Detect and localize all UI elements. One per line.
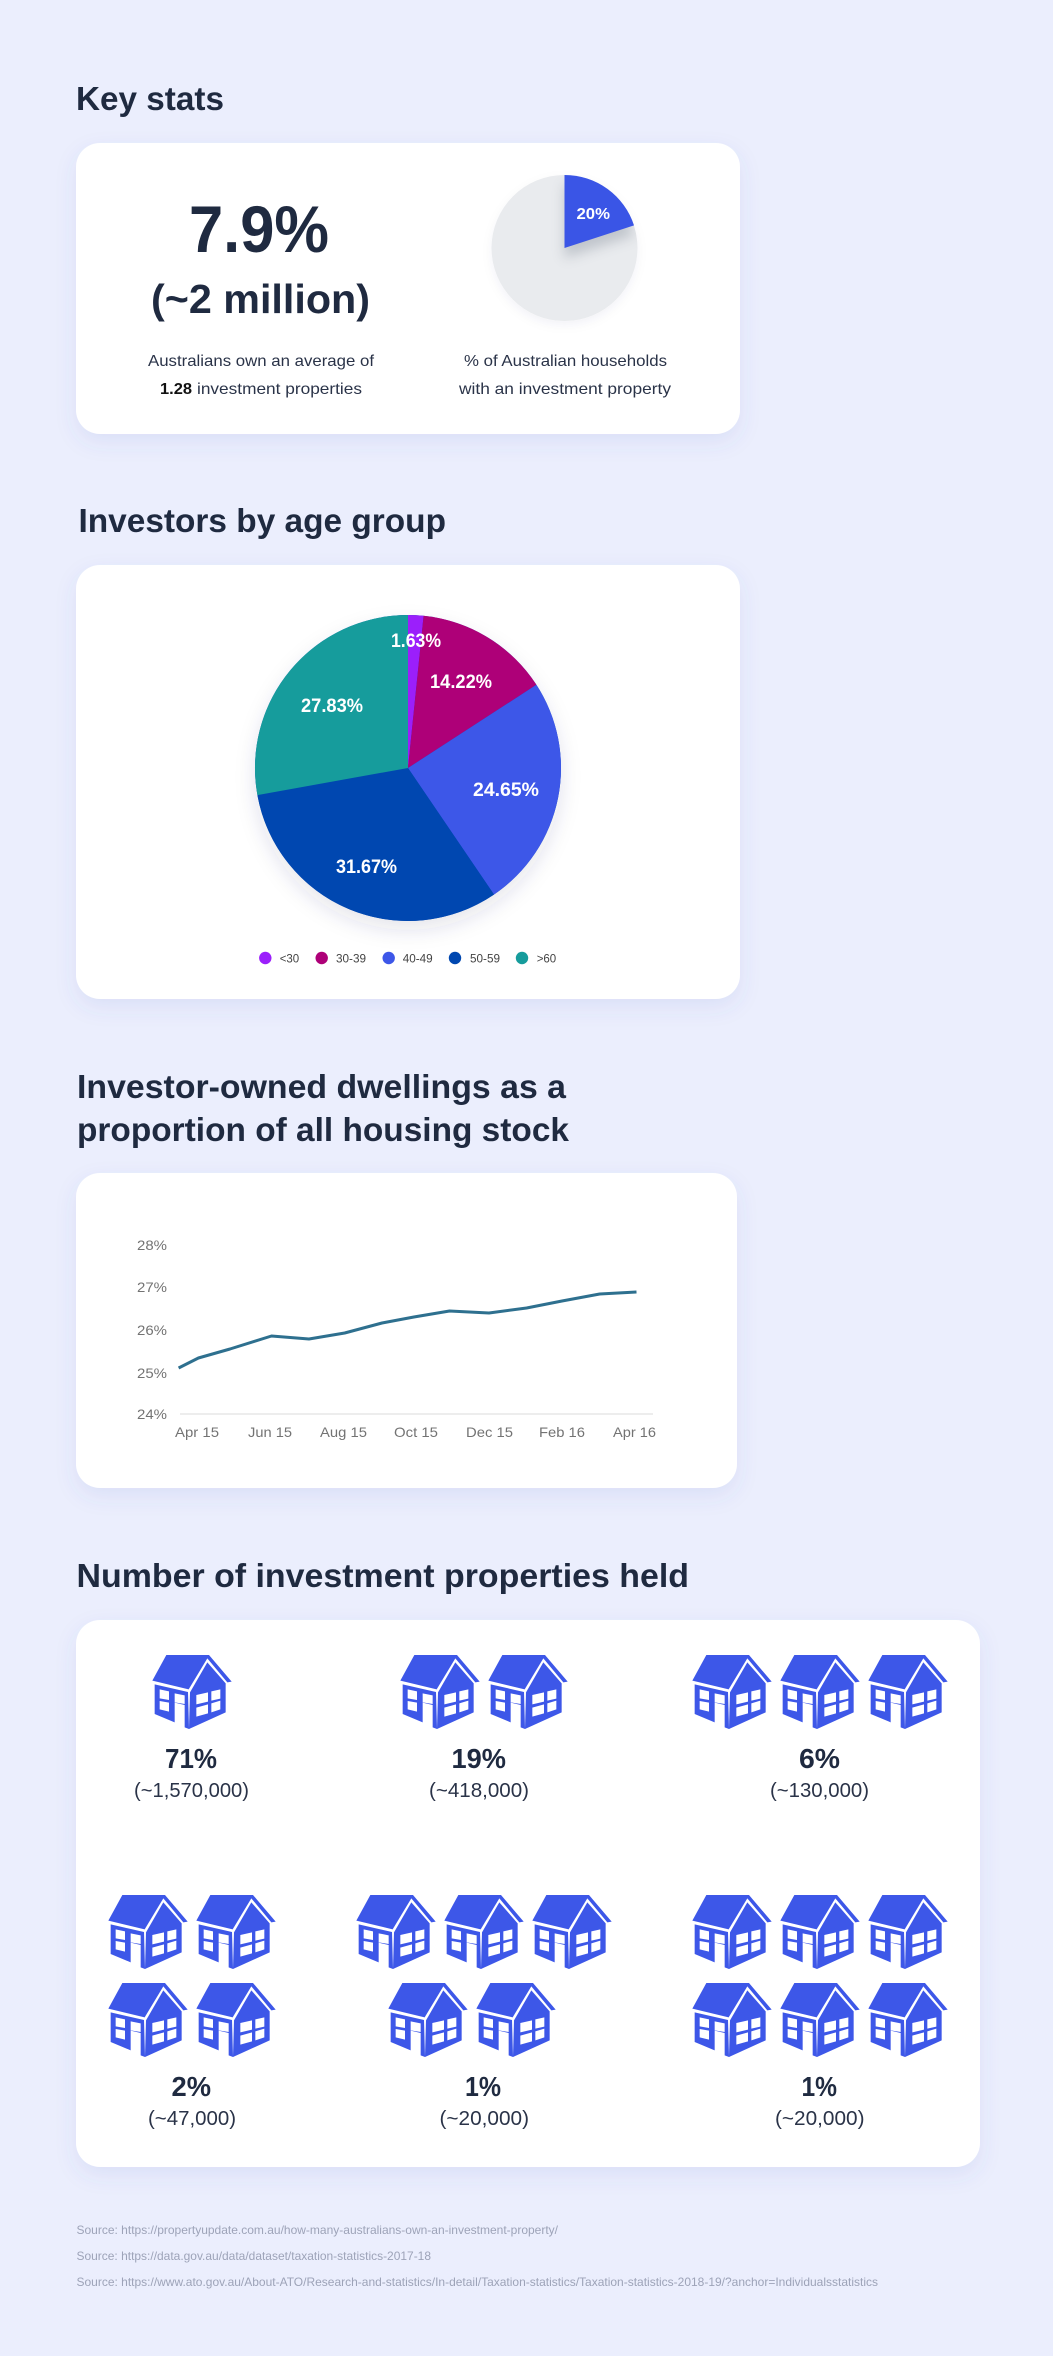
line chart: investor-owned share xyxy=(137,1237,656,1440)
pie chart: age groups xyxy=(255,615,561,921)
heading: Investor-owned dwellings xyxy=(77,1068,570,1148)
heading: Investor-owned dwellings: Investor-owned dwellings as a xyxy=(77,1068,567,1105)
legend: age groups: <30 xyxy=(280,952,300,966)
pie chart: age groups: 1.63% xyxy=(391,631,441,652)
pie chart: age groups: 24.65% xyxy=(473,780,539,801)
text: average properties: 1.28 xyxy=(160,381,192,398)
panel: key stats xyxy=(76,143,740,434)
group: six properties 1%: 1% xyxy=(802,2071,837,2102)
text: households caption: with an investment property xyxy=(458,381,671,398)
group: five properties 1%: 1% xyxy=(465,2071,501,2102)
line chart: investor-owned share: Oct 15 xyxy=(394,1424,438,1440)
pie chart: households 20% xyxy=(492,175,638,321)
group: one property 71%: 71% xyxy=(165,1743,217,1774)
panel: investors by age xyxy=(76,565,740,999)
pie chart: age groups: 27.83% xyxy=(301,696,363,717)
text: households caption: % of Australian households xyxy=(464,353,667,370)
group: five properties 1%: (~20,000) xyxy=(440,2108,529,2130)
line chart: investor-owned share: Apr 16 xyxy=(613,1424,656,1440)
text: average properties xyxy=(148,353,375,398)
pie chart: age groups: 31.67% xyxy=(336,857,397,878)
big stat: 7.9%: 7.9% xyxy=(189,192,329,266)
group: four properties 2% xyxy=(108,1895,276,2130)
line chart: investor-owned share: 27% xyxy=(137,1279,167,1295)
sources xyxy=(76,2223,878,2289)
text: households caption xyxy=(458,353,671,398)
line chart: investor-owned share: Apr 15 xyxy=(175,1424,219,1440)
stat: about 2 million: (~2 million) xyxy=(151,276,370,322)
group: two properties 19%: (~418,000) xyxy=(429,1780,529,1802)
group: four properties 2%: 2% xyxy=(172,2071,211,2102)
legend: age groups: 50-59 xyxy=(470,952,500,966)
legend: age groups xyxy=(259,952,557,966)
legend: age groups: 40-49 xyxy=(403,952,433,966)
heading: Investor-owned dwellings: proportion of all housing stock xyxy=(77,1111,570,1148)
sources: Source: https://data.gov.au/data/dataset/taxation-statistics-2017-18 xyxy=(76,2249,431,2263)
line chart: investor-owned share: Feb 16 xyxy=(539,1424,585,1440)
group: two properties 19% xyxy=(400,1655,568,1802)
line chart: investor-owned share: 24% xyxy=(137,1406,167,1422)
line chart: investor-owned share: Dec 15 xyxy=(466,1424,513,1440)
heading: Key stats: Key stats xyxy=(76,80,224,117)
heading: Number of investment properties held: Number of investment properties held xyxy=(76,1557,689,1594)
group: three properties 6%: 6% xyxy=(799,1743,840,1774)
heading: Investors by age group: Investors by age group xyxy=(78,502,446,539)
group: three properties 6%: (~130,000) xyxy=(770,1780,869,1802)
line chart: investor-owned share: 26% xyxy=(137,1322,167,1338)
group: six properties 1%: (~20,000) xyxy=(775,2108,864,2130)
group: one property 71% xyxy=(134,1655,249,1802)
sources: Source: https://www.ato.gov.au/About-ATO/Research-and-statistics/In-detail/Taxation-statistics/Taxation-statistics-2018-19/?anchor=Individualsstatistics xyxy=(76,2275,878,2289)
group: four properties 2%: (~47,000) xyxy=(148,2108,236,2130)
line chart: investor-owned share: Aug 15 xyxy=(320,1424,367,1440)
group: five properties 1% xyxy=(356,1895,612,2130)
line chart: investor-owned share: 25% xyxy=(137,1365,167,1381)
legend: age groups: 30-39 xyxy=(336,952,366,966)
panel: number of properties xyxy=(76,1620,980,2167)
text: average properties: Australians own an average of xyxy=(148,353,375,370)
legend: age groups: >60 xyxy=(537,952,557,966)
pie chart: age groups: 14.22% xyxy=(430,672,492,693)
group: three properties 6% xyxy=(692,1655,948,1802)
text: average properties: investment properties xyxy=(197,381,362,398)
group: one property 71%: (~1,570,000) xyxy=(134,1780,249,1802)
group: six properties 1% xyxy=(692,1895,948,2130)
group: two properties 19%: 19% xyxy=(452,1743,506,1774)
line chart: investor-owned share: Jun 15 xyxy=(248,1424,292,1440)
pie chart: households 20%: 20% xyxy=(576,206,610,223)
line chart: investor-owned share: 28% xyxy=(137,1237,167,1253)
sources: Source: https://propertyupdate.com.au/how-many-australians-own-an-investment-property/ xyxy=(76,2223,559,2237)
panel: dwellings line chart xyxy=(76,1173,737,1488)
